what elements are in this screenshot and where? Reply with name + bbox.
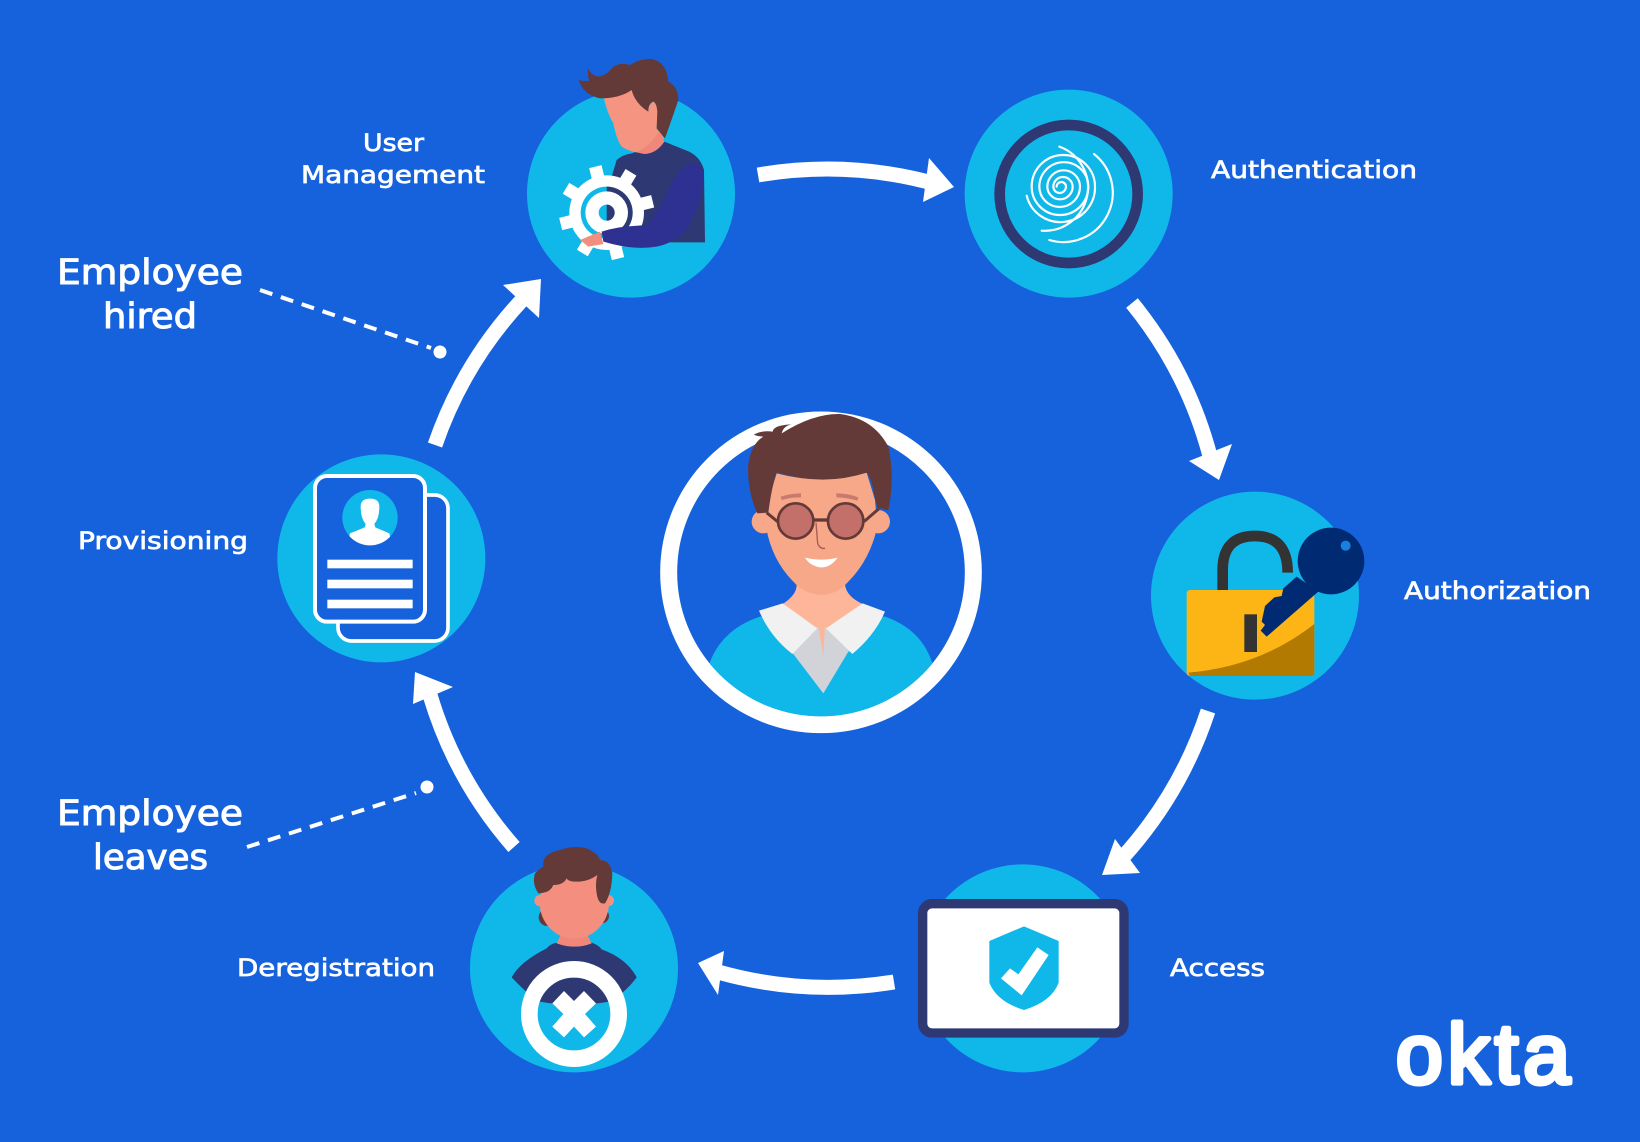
arrow: access to deregistration <box>698 951 894 995</box>
callout text: Employee leaves: Employee <box>57 794 243 834</box>
label: Access: Access <box>1170 954 1265 982</box>
label: Authorization: Authorization <box>1404 577 1591 605</box>
arrow: user management to authentication <box>758 158 954 202</box>
callout text: Employee hired <box>57 253 243 337</box>
label: User Management: User <box>363 129 424 157</box>
label: Deregistration: Deregistration <box>237 954 435 982</box>
callout line: employee hired <box>260 290 446 358</box>
arrow: authentication to authorization <box>1132 303 1232 480</box>
icon: access screen with shield <box>919 864 1127 1072</box>
label: User Management <box>301 129 485 189</box>
arrow: authorization to access <box>1102 711 1208 875</box>
arrow: provisioning to user management <box>435 279 541 445</box>
icon: user management person with gear <box>527 59 735 298</box>
label: Authentication: Authentication <box>1211 156 1417 184</box>
center portrait: user with glasses <box>669 414 973 725</box>
callout text: Employee leaves <box>57 794 243 878</box>
callout text: Employee hired: Employee <box>57 253 243 293</box>
icon: authorization padlock and key <box>1151 492 1364 700</box>
icon: deregistration person with cross <box>470 847 678 1072</box>
callout text: Employee leaves: leaves <box>93 838 208 878</box>
logo: okta: okta <box>1396 1007 1570 1101</box>
label: User Management: Management <box>301 161 485 189</box>
icon: provisioning documents <box>277 454 485 662</box>
icon: authentication fingerprint <box>965 90 1173 298</box>
label: Provisioning: Provisioning <box>78 527 248 555</box>
callout line: employee leaves <box>247 780 434 847</box>
arrow: deregistration to provisioning <box>413 672 514 847</box>
callout text: Employee hired: hired <box>103 297 197 337</box>
